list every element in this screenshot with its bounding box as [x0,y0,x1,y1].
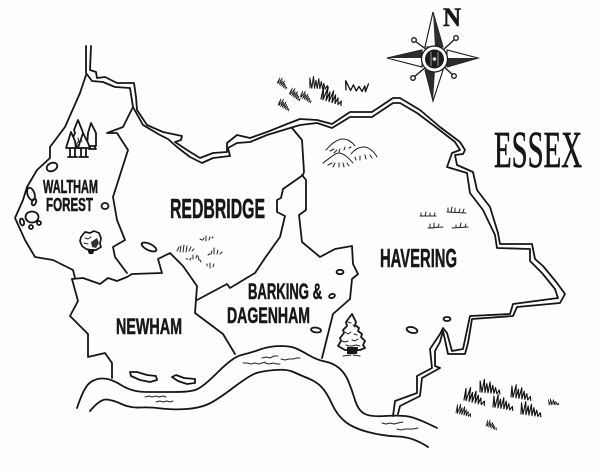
label: Waltham Forest: FOREST [46,195,93,215]
icon: hills in Havering [323,139,377,167]
icon: compass rose [387,12,478,101]
icon: large tree in Havering [338,314,365,356]
compass north letter: N [443,3,461,32]
label: Waltham Forest [43,177,98,215]
water ripples [145,356,418,430]
label: Waltham Forest: WALTHAM [43,177,98,197]
icon: grass tufts north of the border [277,76,369,111]
lakes [19,161,450,384]
river Thames [77,346,437,447]
label: Newham: NEWHAM [116,314,182,339]
label: Barking & Dagenham: BARKING & [248,279,322,304]
label: Redbridge: REDBRIDGE [170,193,265,224]
icon: marsh grass in Havering [420,207,468,228]
label: Barking & Dagenham: DAGENHAM [227,303,310,328]
borough boundaries [15,75,358,378]
icon: small grass tufts in Redbridge [177,236,222,268]
icon: grass tufts south-east [455,379,559,430]
county border: double line along Essex boundary [86,46,565,416]
icon: round bush in Waltham Forest [80,231,101,254]
label: Havering: HAVERING [380,243,457,273]
icon: conifer trees in Waltham Forest [66,120,96,157]
label: Barking & Dagenham [227,279,322,328]
